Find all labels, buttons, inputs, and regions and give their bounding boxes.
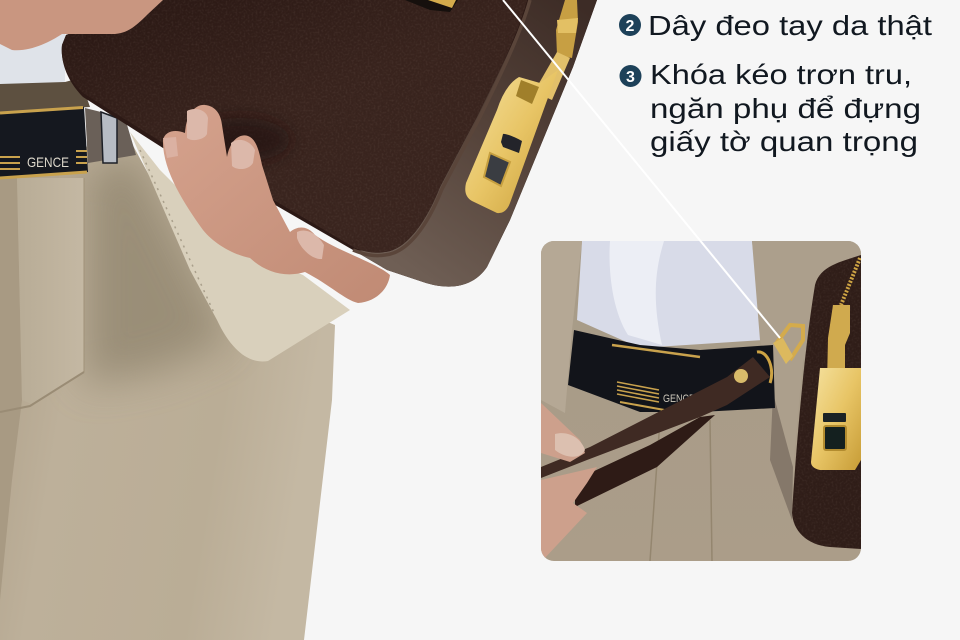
holding hand, top <box>0 0 163 50</box>
inset fingers <box>541 403 597 561</box>
waistband fold <box>0 78 90 112</box>
inset belt logo: GENCE <box>663 393 695 405</box>
finger shadow on bag <box>190 118 290 162</box>
inset zipper pull <box>827 305 850 368</box>
feature 2 text: Dây đeo tay da thật <box>648 10 932 41</box>
side zipper pull <box>534 0 578 100</box>
photo: model holding leather bag <box>0 0 597 640</box>
inset shirt <box>577 241 763 348</box>
inset right lapel <box>752 241 861 340</box>
holding hand, fingers <box>163 105 390 303</box>
trouser shading <box>0 150 230 600</box>
feature 3 label <box>620 59 921 157</box>
top zipper <box>405 0 458 12</box>
number badge 3 <box>620 65 642 87</box>
bag front panel <box>62 0 527 253</box>
feature 2 label <box>619 10 932 41</box>
feature 3 text <box>650 59 921 157</box>
inset trouser crease <box>650 420 712 561</box>
inset bag <box>790 250 865 550</box>
feature 3 text: Khóa kéo trơn tru, <box>650 59 912 90</box>
inset belt <box>568 330 775 412</box>
feature 3 text: ngăn phụ để đựng <box>650 93 921 124</box>
bag gusset side panel <box>353 0 597 287</box>
feature 3 text: giấy tờ quan trọng <box>650 126 918 157</box>
inset photo: leather wrist strap detail <box>541 241 865 561</box>
belt logo: GENCE <box>27 154 69 170</box>
shirt <box>0 30 65 84</box>
number badge 3: 3 <box>626 69 635 86</box>
inset strap <box>541 325 803 507</box>
trousers <box>0 140 335 640</box>
belt with buckle <box>0 107 136 178</box>
inset left lapel <box>541 241 582 413</box>
inset gold fingerprint lock <box>811 368 861 470</box>
gold fingerprint lock <box>465 70 558 213</box>
bag piping <box>353 0 530 256</box>
bag <box>60 0 597 287</box>
inset metal clasp <box>775 325 803 360</box>
white callout line to strap <box>503 0 780 338</box>
pocket flap <box>130 132 350 361</box>
number badge 2: 2 <box>626 18 635 35</box>
number badge 2 <box>619 14 641 36</box>
